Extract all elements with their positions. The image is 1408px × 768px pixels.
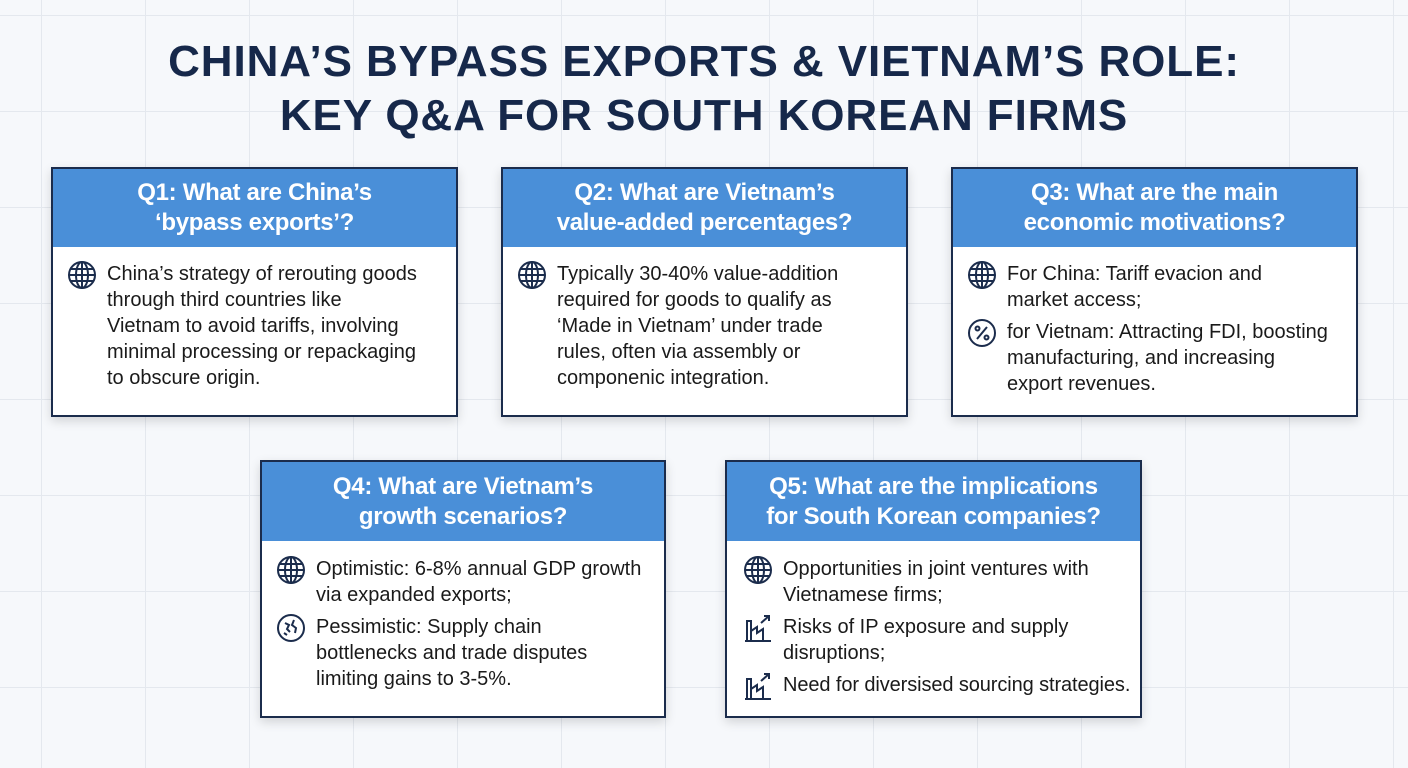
heading Q5 — [727, 462, 1140, 541]
text Q4: Pessimistic: Supply chain — [316, 616, 542, 638]
text Q1: to obscure origin. — [107, 367, 260, 389]
text Q5: Vietnamese firms; — [783, 584, 943, 606]
text Q4 — [277, 556, 641, 690]
text Q1: Vietnam to avoid tariffs, involving — [107, 315, 399, 337]
text Q2: Typically 30-40% value-addition — [557, 263, 838, 285]
text Q3: market access; — [1007, 289, 1141, 311]
panel: Q2 — [501, 167, 908, 417]
text Q4: Optimistic: 6-8% annual GDP growth — [316, 558, 641, 580]
text Q1: through third countries like — [107, 289, 342, 311]
text Q5: Opportunities in joint ventures with — [783, 558, 1089, 580]
text Q5: Risks of IP exposure and supply — [783, 616, 1068, 638]
heading Q4: growth scenarios? — [359, 502, 567, 530]
text Q3 — [968, 261, 1328, 395]
text Q5: Need for diversised sourcing strategies. — [783, 674, 1130, 696]
heading Q5: for South Korean companies? — [766, 502, 1101, 530]
text Q5: disruptions; — [783, 642, 885, 664]
text Q2 — [518, 261, 838, 389]
heading Q3 — [953, 169, 1356, 247]
text Q4: via expanded exports; — [316, 584, 512, 606]
panel: Q5 — [725, 460, 1142, 718]
text Q3: manufacturing, and increasing — [1007, 347, 1275, 369]
text Q2: componenic integration. — [557, 367, 769, 389]
heading Q3: Q3: What are the main — [1031, 179, 1278, 206]
text Q3: for Vietnam: Attracting FDI, boosting — [1007, 321, 1328, 343]
heading Q1: ‘bypass exports’? — [155, 209, 354, 236]
text Q2: rules, often via assembly or — [557, 341, 800, 363]
text Q3: For China: Tariff evacion and — [1007, 263, 1262, 285]
heading Q2: Q2: What are Vietnam’s — [574, 179, 835, 206]
heading Q1 — [53, 169, 456, 247]
heading Q3: economic motivations? — [1024, 209, 1285, 236]
text Q1: minimal processing or repackaging — [107, 341, 416, 363]
panel: Q3 — [951, 167, 1358, 417]
heading Q4: Q4: What are Vietnam’s — [333, 472, 593, 500]
panel: Q1 — [51, 167, 458, 417]
text Q2: required for goods to qualify as — [557, 289, 832, 311]
heading Q2: value-added percentages? — [557, 209, 852, 236]
title: KEY Q&A FOR SOUTH KOREAN FIRMS — [280, 91, 1128, 140]
text Q3: export revenues. — [1007, 373, 1156, 395]
heading Q1: Q1: What are China’s — [137, 179, 372, 206]
text Q2: ‘Made in Vietnam’ under trade — [557, 315, 823, 337]
text Q4: bottlenecks and trade disputes — [316, 642, 587, 664]
title — [168, 37, 1240, 140]
title: CHINA’S BYPASS EXPORTS & VIETNAM’S ROLE: — [168, 37, 1240, 86]
text Q5 — [744, 556, 1130, 700]
heading Q4 — [262, 462, 664, 541]
text Q1 — [68, 261, 417, 389]
text Q1: China’s strategy of rerouting goods — [107, 263, 417, 285]
panel: Q4 — [260, 460, 666, 718]
heading Q5: Q5: What are the implications — [769, 472, 1098, 500]
heading Q2 — [503, 169, 906, 247]
text Q4: limiting gains to 3-5%. — [316, 668, 512, 690]
